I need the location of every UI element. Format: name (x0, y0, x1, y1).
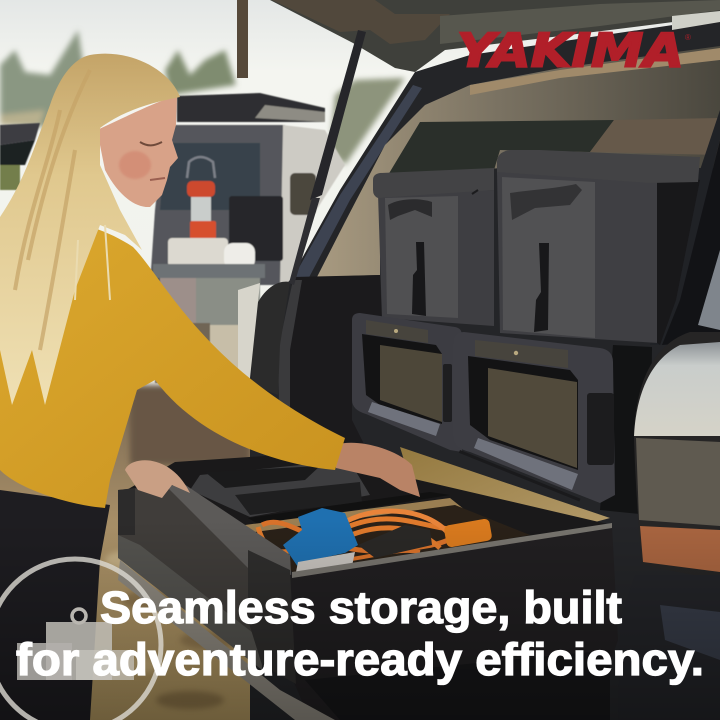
hand on drawer (125, 460, 190, 498)
logo: Yakima: YAKIMA (457, 24, 684, 78)
cargo tray (245, 498, 530, 575)
background vehicle and camp table (0, 93, 345, 385)
left hard case (352, 313, 462, 452)
headliner (317, 46, 720, 277)
black side wall (282, 275, 382, 460)
gravel mottling (105, 551, 240, 709)
bottom darkening overlay (0, 520, 720, 720)
legs (0, 490, 110, 720)
woman (0, 54, 420, 720)
drawer interior (118, 455, 612, 575)
icon: storage box in circle (0, 559, 161, 720)
tailgate (270, 0, 720, 285)
rear vehicle (150, 125, 285, 285)
headline text (16, 582, 704, 685)
post (237, 0, 248, 78)
right soft case (497, 150, 700, 345)
sweater (0, 221, 345, 508)
side body/spare (250, 282, 290, 395)
left vehicle roof (0, 123, 40, 145)
bag (229, 196, 283, 261)
storage boxes: lower hard cases (352, 313, 652, 515)
bumper below (305, 650, 610, 720)
tub and towel (168, 238, 228, 267)
rear window (385, 120, 614, 180)
table (153, 264, 265, 278)
right hard case (453, 332, 652, 515)
taillight (618, 332, 720, 720)
organizers (190, 462, 450, 525)
roof rack (177, 93, 325, 122)
hand reaching (336, 443, 420, 497)
headline text: for adventure-ready efficiency. (16, 634, 704, 685)
hair (0, 54, 180, 405)
storage boxes: upper soft cases (373, 150, 700, 345)
corner post (248, 550, 296, 684)
face (97, 97, 178, 207)
logo: Yakima: ® (685, 33, 691, 42)
right pillar (650, 110, 720, 345)
lantern (187, 157, 215, 178)
drawer (118, 455, 618, 720)
drawer side panel and rim (118, 485, 292, 680)
drawer front face (290, 526, 618, 720)
gas strut (310, 30, 366, 200)
left soft case (373, 168, 494, 326)
headline text: Seamless storage, built (100, 582, 622, 633)
car body and cargo opening (238, 18, 720, 720)
wood drawer slide (400, 447, 610, 537)
